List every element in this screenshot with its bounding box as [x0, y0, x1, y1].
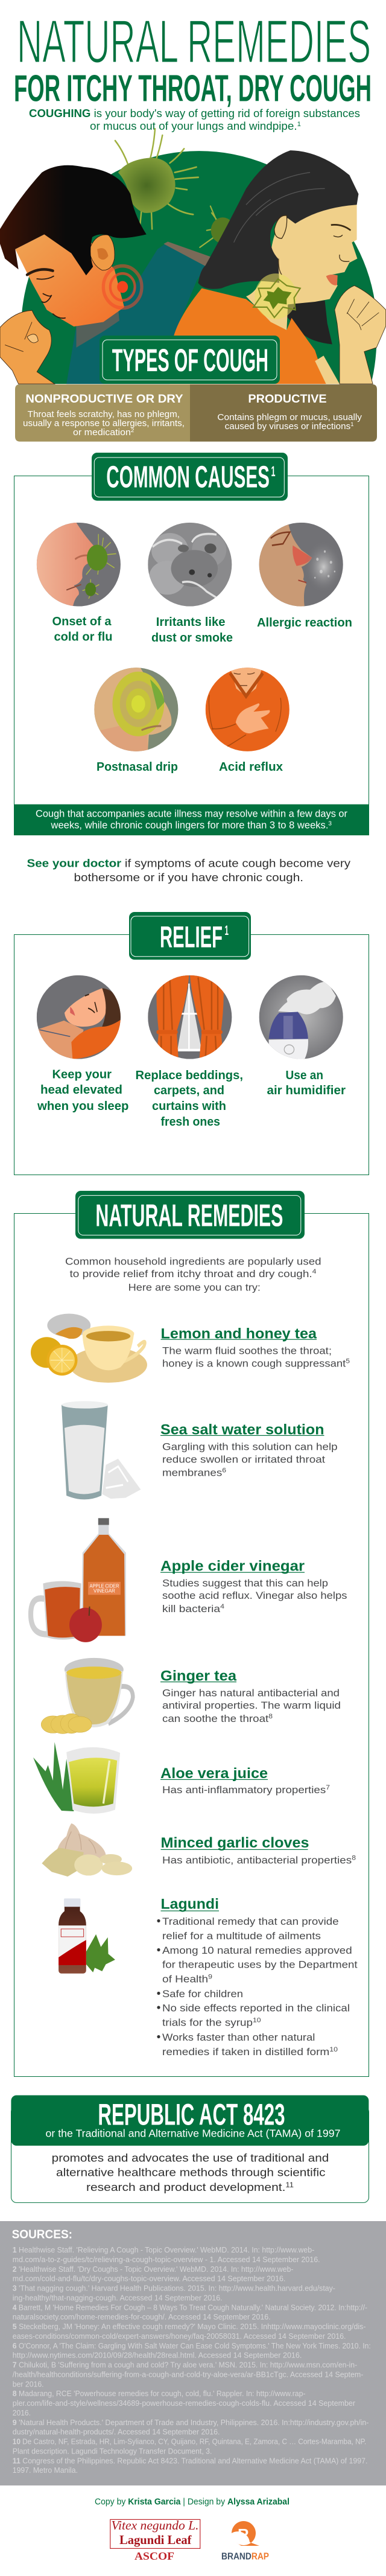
list: lagundi benefits: 10 [329, 2046, 338, 2053]
source list: 8 Madarang, RCE 'Powerhouse remedies for cough, cold, flu.' Rappler. In: http://www.rap- [13, 2389, 306, 2398]
source list: 7 Chilukoti, B 'Suffering from a cough and cold? Try aloe vera.' MSN. 2015. In: http://www.msn.com/en-in- [13, 2361, 357, 2370]
panel: natural remedies [14, 1191, 369, 2076]
panel: productive [190, 384, 377, 442]
source list: /health/healthconditions/suffering-from-a-cough-and-cold-try-aloe-vera/ar-BB1cTgc. Accessed 14 Septem- [13, 2370, 363, 2379]
remedy: aloe vera juice [160, 1765, 330, 1796]
hero figures [0, 129, 386, 384]
remedy: ginger tea [160, 1668, 341, 1724]
remedy: apple cider vinegar: soothe acid reflux. Vinegar also helps [162, 1590, 347, 1601]
credits: Copy by Krista Garcia | Design by Alyssa Arizabal [95, 2497, 290, 2507]
source list [13, 2246, 371, 2475]
list: lagundi benefits: 10 [253, 2017, 261, 2024]
source list: ber 2016. [13, 2380, 44, 2388]
icon: curtains [148, 975, 232, 1059]
source list: 11 Congress of the Philippines. Republic Act 8423. Traditional and Alternative Medicine Act (TAMA) of 1997. [13, 2456, 367, 2465]
panel: nonproductive or dry: 2 [131, 427, 134, 433]
panel: nonproductive or dry: or medication [73, 428, 125, 438]
labels: causes: cold or flu [54, 631, 112, 644]
list: lagundi benefits: remedies if taken in distilled form [162, 2046, 312, 2058]
woman arm [315, 355, 340, 384]
source list: 2 'Healthwise Staff. 'Dry Coughs - Topic Overview.' WebMD. 2014. In: http://www.web- [13, 2265, 294, 2274]
logo: lagundi leaf ascof: ASCOF [134, 2550, 174, 2562]
heading: natural remedies [75, 1191, 305, 1239]
man hand [0, 310, 55, 384]
republic act description: research and product development. [86, 2181, 262, 2193]
labels: relief: carpets, and [154, 1084, 224, 1097]
icon: lagundi syrup [59, 1898, 115, 1974]
source list: 1 Healthwise Staff. 'Relieving A Cough - Topic Overview.' WebMD. 2014. In: http://www.web- [13, 2246, 314, 2254]
remedy: lagundi [157, 1896, 358, 2058]
list: lagundi benefits: Traditional remedy that can provide [162, 1916, 339, 1927]
labels: causes: Acid reflux [219, 760, 283, 774]
list: lagundi benefits: relief for a multitude of ailments [162, 1930, 321, 1942]
labels: causes: Irritants like [156, 616, 226, 629]
panel: relief [14, 912, 369, 1175]
remedy: apple cider vinegar: 4 [220, 1603, 224, 1610]
list: lagundi benefits: for therapeutic uses by the Department [162, 1959, 358, 1971]
remedy: aloe vera juice: Aloe vera juice [160, 1765, 268, 1782]
remedy: apple cider vinegar: Apple cider vinegar [160, 1558, 305, 1575]
irritated throat rings [103, 266, 142, 308]
labels: causes: Onset of a [52, 615, 112, 628]
panel: republic act 8423 [11, 2096, 369, 2202]
source list: Plant description. Lagundi Technology Transfer Document, 3. [13, 2447, 212, 2455]
logo: brandrap: BRANDRAP [221, 2551, 269, 2562]
man ear [89, 235, 115, 270]
intro text: COUGHING is your body's way of getting rid of foreign substances [29, 107, 360, 120]
labels: causes: dust or smoke [151, 631, 233, 645]
heading: relief: 1 [224, 923, 229, 938]
text: remedies intro: Here are some you can try: [128, 1281, 261, 1293]
panel: productive: caused by viruses or infections [225, 422, 344, 432]
remedy: lagundi: Lagundi [160, 1896, 219, 1913]
woman face and neck [246, 199, 357, 330]
callout: acute and chronic cough [14, 805, 369, 835]
source list: 9 'Natural Health Products.' Department of Trade and Industry, Philippines. 2016. In:http://industry.gov.ph/in- [13, 2418, 369, 2427]
source list: dustry/natural-health-products/. Accessed 14 September 2016. [13, 2428, 220, 2437]
heading: relief [129, 912, 251, 960]
list: lagundi benefits: Safe for children [162, 1988, 243, 2000]
source list: 5 Steckelberg, JM 'Honey: An effective cough remedy?' Mayo Clinic. 2015. Inhttp://www.mayoclinic.org/dis- [13, 2323, 366, 2331]
woman shirt [170, 289, 326, 384]
logo: lagundi leaf ascof: Vitex negundo L. [111, 2518, 199, 2533]
list: lagundi benefits: No side effects reported in the clinical [162, 2003, 350, 2014]
source list: 10 De Castro, NF, Estrada, HR, Lim-Sylianco, CY, Quijano, RF, Quintana, E, Zamora, C … Cortes-Maramba, NP. [13, 2437, 366, 2446]
callout: acute and chronic cough: weeks, while chronic cough lingers for more than 3 to 8 weeks. [51, 820, 327, 831]
remedy: sea salt water solution: reduce swollen or irritated throat [162, 1453, 325, 1465]
heading: common causes: COMMON CAUSES [106, 460, 270, 494]
labels: relief: head elevated [40, 1083, 122, 1097]
logo: brandrap: R [238, 2525, 249, 2543]
labels: causes: Allergic reaction [257, 616, 352, 630]
list: lagundi benefits: Works faster than other natural [162, 2032, 315, 2043]
republic act description: promotes and advocates the use of traditional and [52, 2152, 329, 2164]
list: lagundi benefits: 9 [208, 1974, 212, 1981]
man hair [0, 165, 147, 275]
text: see your doctor: See your doctor if symptoms of acute cough become very [27, 857, 351, 870]
text: remedies intro [65, 1255, 321, 1293]
woman lower hair [285, 301, 332, 344]
intro text [29, 107, 360, 132]
icon: acid reflux [206, 667, 290, 751]
remedy: apple cider vinegar: kill bacteria [162, 1603, 214, 1615]
remedy: apple cider vinegar: Studies suggest that this can help [162, 1578, 328, 1589]
remedy: ginger tea: antiviral properties. The warm liquid [162, 1700, 341, 1711]
large virus [115, 129, 198, 229]
remedy: minced garlic cloves: Has antibiotic, antibacterial properties [162, 1854, 333, 1866]
source list: md.com/cold-and-flu/tc/dry-coughs-topic-overview. Accessed 14 September 2016. [13, 2275, 285, 2283]
panel: nonproductive or dry: NONPRODUCTIVE OR DRY [25, 393, 183, 406]
republic act heading: or the Traditional and Alternative Medicine Act (TAMA) of 1997 [46, 2127, 340, 2139]
source list: ing-healthy/that-nagging-cough. Accessed 14 September 2016. [13, 2294, 223, 2302]
labels: relief: fresh ones [160, 1115, 220, 1129]
remedy: ginger tea: 8 [268, 1713, 273, 1720]
icon: aloe vera juice [33, 1742, 120, 1814]
remedy: lemon and honey tea: The warm fluid soothes the throat; [162, 1345, 332, 1356]
intro text: or mucus out of your lungs and windpipe. [90, 120, 288, 132]
labels: relief: Keep your [52, 1068, 112, 1082]
panel: productive: 1 [350, 421, 353, 427]
source list: 6 O'Connor, A 'The Claim: Gargling With Salt Water Can Ease Cold Symptoms.' The New York Times. 2010. In: [13, 2342, 371, 2350]
list: lagundi benefits: trials for the syrup [162, 2017, 244, 2029]
labels: relief: Use an [286, 1069, 323, 1082]
republic act heading [11, 2096, 369, 2146]
icon: apple cider vinegar: APPLE CIDER [90, 1583, 119, 1589]
circle icons: causes [37, 521, 343, 753]
small virus [200, 206, 235, 247]
remedy: sea salt water solution: Gargling with this solution can help [162, 1441, 338, 1453]
remedy: sea salt water solution: membranes [162, 1467, 217, 1478]
icon: cold or flu [37, 521, 121, 608]
icon: ginger tea [41, 1658, 133, 1733]
text: remedies intro: 4 [312, 1268, 316, 1275]
remedy: lemon and honey tea [160, 1325, 350, 1369]
text: remedies intro: to provide relief from itchy throat and dry cough. [70, 1268, 287, 1280]
panel: common causes [14, 453, 369, 835]
man face details [27, 269, 65, 318]
icon: apple cider vinegar: VINEGAR [93, 1588, 115, 1593]
source list: pler.com/life-and-style/wellness/34689-powerhouse-remedies-cough-colds-flu. Accessed 14 September [13, 2399, 355, 2408]
icon: minced garlic [42, 1823, 132, 1876]
icon: lemon and honey tea [31, 1314, 147, 1383]
labels: causes [52, 615, 352, 774]
heading: common causes: 1 [271, 464, 275, 480]
labels: relief: curtains with [152, 1100, 226, 1113]
remedy: ginger tea: Ginger has natural antibacterial and [162, 1688, 340, 1699]
text: see your doctor: bothersome or if you have chronic cough. [74, 871, 303, 884]
woman hand [335, 285, 386, 384]
list: lagundi benefits: of Health [162, 1974, 203, 1985]
icon: allergic reaction [259, 521, 343, 608]
logo: brandrap [221, 2521, 269, 2562]
remedy: aloe vera juice: Has anti-inflammatory properties [162, 1784, 311, 1796]
remedy: minced garlic cloves: Minced garlic cloves [160, 1835, 309, 1851]
source list: 2016. [13, 2409, 31, 2417]
callout: acute and chronic cough: Cough that accompanies acute illness may resolve within a few days or [36, 809, 347, 820]
remedy: ginger tea: can soothe the throat [162, 1713, 259, 1724]
icon: apple cider vinegar [31, 1518, 126, 1642]
panel: sources [0, 2221, 386, 2485]
icon: postnasal drip [94, 666, 179, 753]
icon: dust or smoke [148, 523, 232, 607]
list: lagundi benefits [157, 1916, 358, 2058]
labels: relief: air humidifier [267, 1084, 346, 1097]
intro text: 1 [297, 121, 301, 128]
woman hair [198, 150, 358, 289]
source list: 4 Barrett, M 'Home Remedies For Cough – 8 Ways To Treat Cough Naturally.' Natural Society. 2012. In:http://- [13, 2303, 367, 2312]
remedy: lemon and honey tea: honey is a known cough suppressant [162, 1357, 331, 1369]
source list: 1997. Metro Manila. [13, 2466, 78, 2475]
remedy: minced garlic cloves [160, 1835, 356, 1866]
panel: sources: SOURCES: [12, 2228, 72, 2242]
panel: nonproductive or dry: Throat feels scratchy, has no phlegm, [28, 410, 180, 419]
source list: eases-conditions/common-cold/expert-answers/honey/faq-20058031. Accessed 14 September 2016. [13, 2332, 346, 2341]
labels: relief [37, 1068, 346, 1129]
republic act description: 11 [285, 2182, 294, 2189]
source list: md.com/a-to-z-guides/tc/relieving-a-cough-topic-overview - 1. Accessed 14 September 2016. [13, 2256, 320, 2264]
icon: head elevated [37, 975, 122, 1060]
heading: common causes [92, 453, 288, 501]
remedy: lemon and honey tea: 5 [346, 1357, 350, 1365]
man head [15, 234, 124, 327]
icon: sea salt water [62, 1401, 141, 1499]
remedy: sea salt water solution [160, 1422, 338, 1478]
heading: types of cough [100, 336, 280, 384]
icon: air humidifier [259, 975, 343, 1060]
remedy: sea salt water solution: Sea salt water solution [160, 1422, 324, 1438]
panel: productive: PRODUCTIVE [248, 393, 327, 406]
panel: nonproductive or dry: usually a response to allergies, irritants, [23, 419, 185, 429]
hero illustration: coughing man and woman [0, 129, 386, 384]
source list: 3 'That nagging cough.' Harvard Health Publications. 2015. In: http://www.health.harvard.edu/stay- [13, 2284, 335, 2292]
heading: relief: RELIEF [160, 920, 223, 954]
remedy: aloe vera juice: 7 [326, 1784, 330, 1791]
panel: nonproductive or dry [15, 384, 190, 442]
republic act description [52, 2152, 329, 2193]
remedy: sea salt water solution: 6 [222, 1467, 226, 1474]
throat irritation star [253, 273, 300, 319]
labels: relief: Replace beddings, [135, 1069, 243, 1082]
logo: lagundi leaf ascof [110, 2518, 200, 2562]
source list: http://www.nytimes.com/2010/09/28/health/28real.html. Accessed 14 September 2016. [13, 2351, 302, 2360]
text: remedies intro: Common household ingredients are popularly used [65, 1255, 321, 1267]
remedy: minced garlic cloves: 8 [352, 1854, 356, 1861]
man shirt [66, 243, 212, 384]
source list: naturalsociety.com/home-remedies-for-cough/. Accessed 14 September 2016. [13, 2313, 271, 2321]
callout: acute and chronic cough: 3 [328, 820, 332, 827]
list: lagundi benefits: Among 10 natural remedies approved [162, 1945, 352, 1956]
labels: causes: Postnasal drip [96, 760, 178, 774]
panel: productive: Contains phlegm or mucus, usually [217, 413, 362, 422]
circle icons: relief [37, 975, 343, 1060]
labels: relief: when you sleep [37, 1100, 129, 1113]
republic act description: alternative healthcare methods through scientific [56, 2166, 326, 2179]
remedy: ginger tea: Ginger tea [160, 1668, 237, 1685]
green circle background [21, 151, 377, 384]
logo: lagundi leaf ascof: Lagundi Leaf [119, 2533, 192, 2547]
woman ear and face details [274, 215, 350, 275]
remedy: lemon and honey tea: Lemon and honey tea [160, 1325, 317, 1342]
title [14, 8, 372, 109]
remedy: apple cider vinegar [160, 1558, 347, 1615]
text: see your doctor [27, 857, 351, 884]
